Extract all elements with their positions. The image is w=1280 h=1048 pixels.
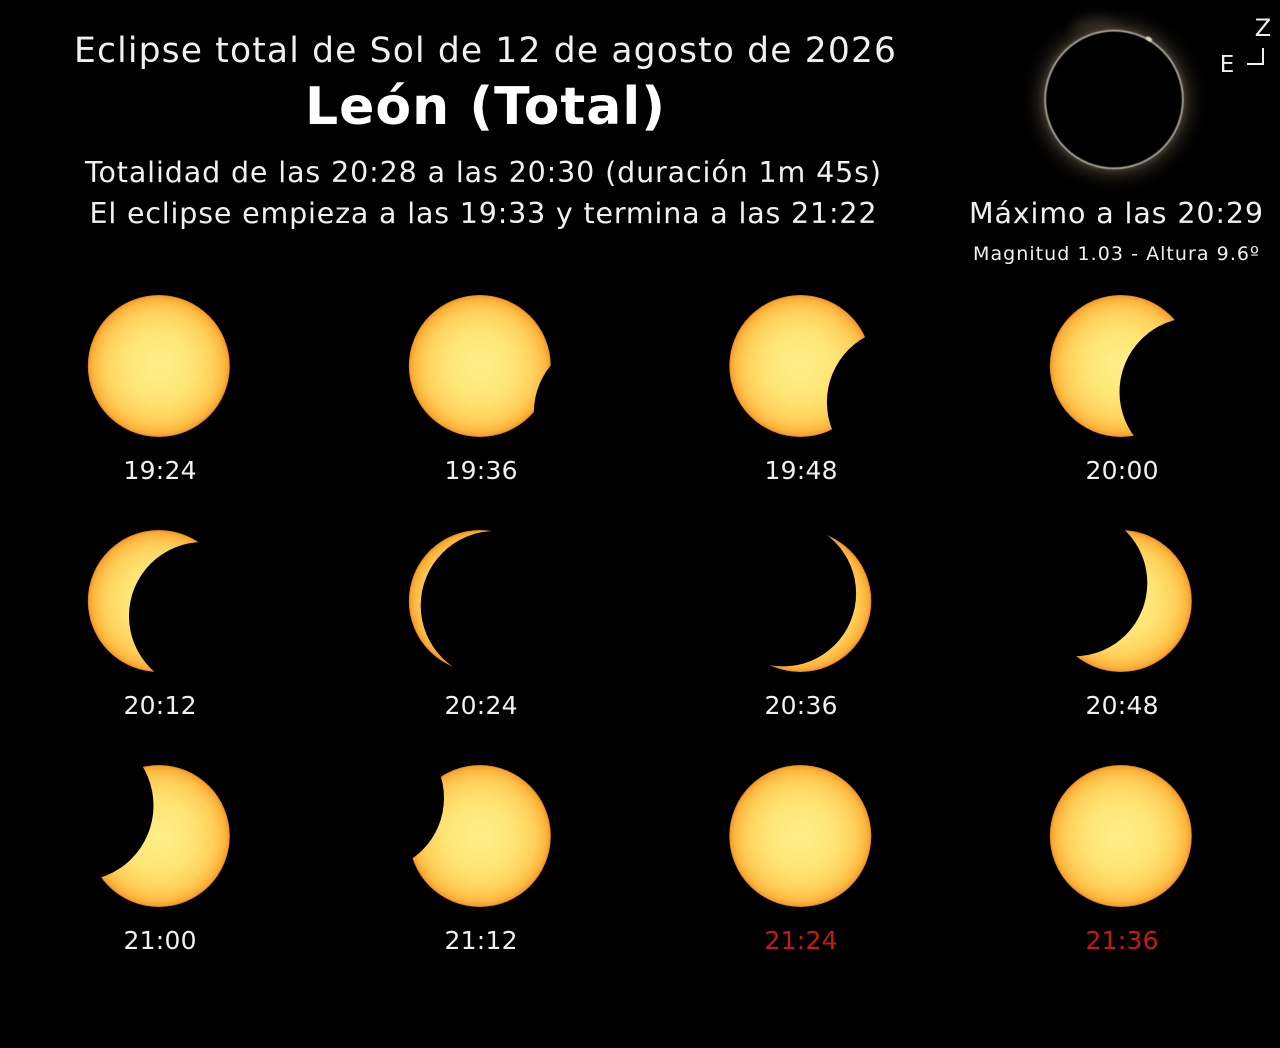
phase 21:00: 21:00	[124, 926, 196, 955]
phase 20:24	[409, 530, 570, 720]
phase 20:36: 20:36	[764, 691, 838, 720]
phase 20:48: 20:48	[1086, 691, 1158, 720]
phase 21:12	[297, 724, 551, 955]
phase 21:00	[2, 730, 230, 955]
magnitude and altitude: Magnitud 1.03 - Altura 9.6º	[973, 243, 1259, 265]
phase 20:12	[88, 530, 277, 720]
phase 20:00: 20:00	[1086, 456, 1158, 485]
phase 21:24, after the end of the eclipse	[729, 765, 871, 955]
maximum time: Máximo a las 20:29	[969, 197, 1263, 230]
phase 20:00	[1050, 295, 1268, 485]
phase 21:36, after the end of the eclipse: 21:36	[1086, 926, 1158, 955]
phase 21:12: 21:12	[444, 926, 518, 955]
phase 19:48	[729, 295, 977, 485]
title: Eclipse total de Sol de 12 de agosto de 2026	[74, 31, 896, 71]
phase 19:36: 19:36	[444, 456, 518, 485]
location heading: León (Total)	[305, 77, 665, 137]
phase 20:36	[710, 520, 871, 720]
orientation marker: zenith and east: E	[1220, 52, 1234, 78]
total eclipse image with corona	[1019, 4, 1209, 194]
orientation marker: zenith and east	[1220, 14, 1271, 78]
phase 20:24: 20:24	[444, 691, 518, 720]
phase 19:36	[409, 295, 681, 486]
phase 19:24	[88, 295, 230, 485]
totality times: Totalidad de las 20:28 a las 20:30 (duración 1m 45s)	[84, 156, 881, 189]
phase 21:36, after the end of the eclipse	[1050, 765, 1192, 955]
phase 21:24, after the end of the eclipse: 21:24	[764, 926, 838, 955]
phase 19:48: 19:48	[764, 456, 838, 485]
orientation marker: zenith and east: Z	[1255, 14, 1271, 42]
phase 20:12: 20:12	[124, 691, 196, 720]
phase 20:48	[1001, 510, 1192, 720]
phase 19:24: 19:24	[124, 456, 196, 485]
eclipse start and end times: El eclipse empieza a las 19:33 y termina a las 21:22	[90, 197, 876, 230]
